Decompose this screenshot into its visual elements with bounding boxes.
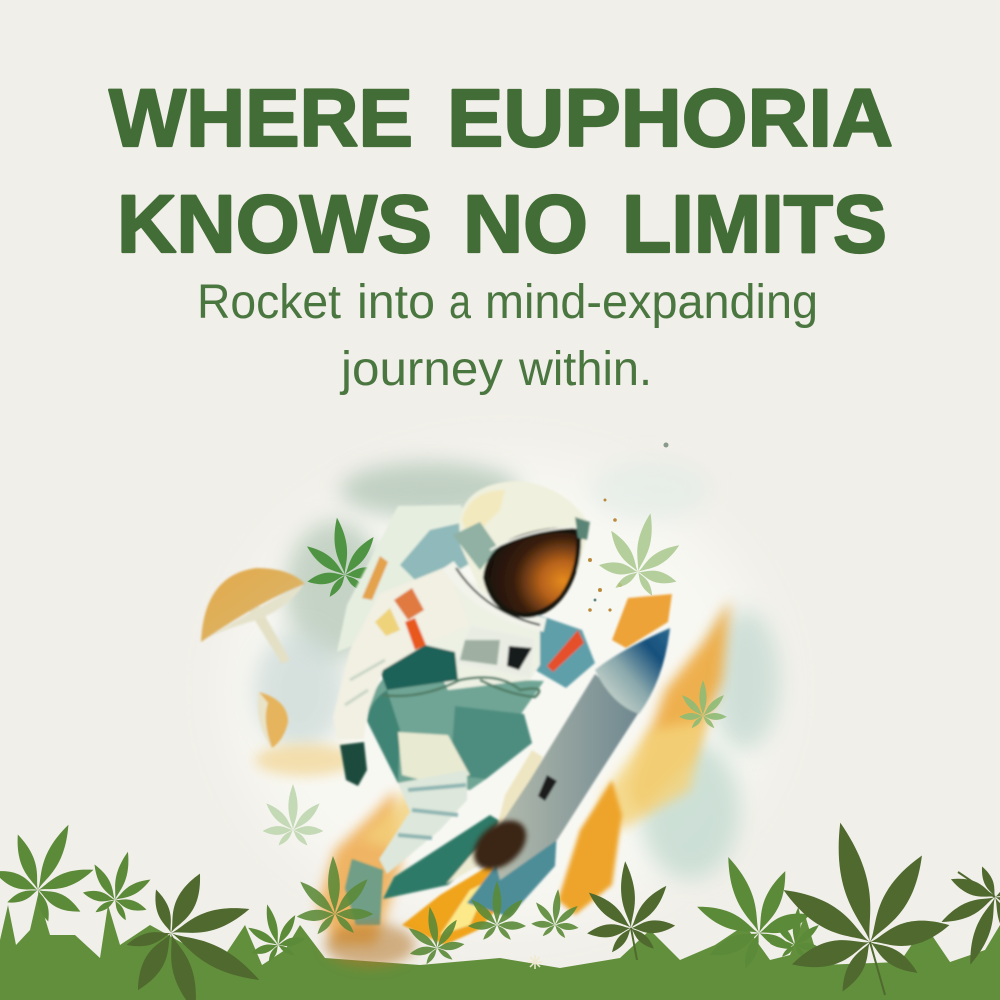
ground foliage bbox=[0, 895, 1000, 1000]
hatch bbox=[538, 775, 557, 801]
lower fin bbox=[383, 815, 500, 899]
subtitle bbox=[197, 276, 818, 396]
nose bbox=[595, 628, 670, 714]
sleeve stripe bbox=[547, 630, 584, 672]
title: NO bbox=[463, 179, 588, 270]
pale cannabis leaves bbox=[263, 505, 727, 847]
chest pack bbox=[456, 626, 534, 677]
torso bbox=[425, 566, 540, 690]
collar stripes bbox=[456, 568, 540, 625]
subtitle: within. bbox=[518, 343, 652, 396]
astronaut bbox=[333, 481, 595, 874]
visor rim bbox=[483, 527, 581, 618]
lower leg bbox=[379, 770, 467, 874]
title: EUPHORIA bbox=[447, 73, 893, 164]
scorch bbox=[464, 810, 536, 880]
light green leaves bbox=[0, 805, 823, 982]
cream sliver bbox=[498, 750, 543, 823]
tubing bbox=[382, 678, 539, 697]
cream band bbox=[398, 732, 470, 785]
subtitle: journey bbox=[339, 343, 503, 396]
arm bbox=[333, 566, 470, 739]
splatter dots bbox=[588, 442, 668, 612]
rocket bbox=[345, 628, 670, 945]
flame tint over ground bbox=[325, 923, 415, 967]
flame core bbox=[440, 880, 490, 935]
visor bbox=[488, 533, 576, 613]
helmet bbox=[459, 481, 590, 620]
arm patch bbox=[405, 618, 426, 650]
body bbox=[490, 674, 639, 880]
right thigh shade bbox=[450, 706, 532, 779]
backpack shadow bbox=[400, 522, 475, 590]
pack controls bbox=[460, 640, 500, 665]
title: LIMITS bbox=[622, 179, 887, 270]
chest screen bbox=[507, 646, 532, 670]
title: WHERE bbox=[109, 73, 413, 164]
title bbox=[109, 73, 893, 270]
hips bbox=[367, 675, 544, 790]
subtitle: into bbox=[357, 276, 435, 329]
small pale star bbox=[528, 955, 542, 969]
torso shade bbox=[379, 645, 458, 690]
helmet knob bbox=[575, 517, 590, 540]
fin cream bbox=[446, 821, 513, 884]
yellow patch bbox=[375, 608, 400, 636]
subtitle: Rocket bbox=[197, 276, 341, 329]
arm fold shading bbox=[345, 660, 385, 705]
glove bbox=[340, 742, 367, 786]
mushrooms bbox=[201, 568, 305, 748]
visor stripe bbox=[490, 527, 581, 550]
backpack bbox=[337, 505, 480, 652]
watercolor washes bbox=[230, 460, 780, 945]
flame bbox=[402, 865, 515, 945]
boot bbox=[345, 859, 383, 925]
backpack marks bbox=[362, 556, 388, 600]
helmet clamp bbox=[453, 522, 498, 570]
dark leaves bbox=[107, 803, 1000, 1000]
helmet highlight bbox=[462, 490, 505, 540]
left hip shade bbox=[367, 690, 400, 783]
subtitle: a bbox=[449, 276, 471, 329]
rear fin bbox=[467, 830, 557, 917]
sleeve bbox=[530, 612, 595, 688]
title: KNOWS bbox=[117, 179, 432, 270]
collar bbox=[448, 565, 545, 625]
knee bands bbox=[398, 785, 466, 838]
small leaf stems bbox=[631, 872, 995, 995]
flag patch bbox=[394, 588, 424, 620]
subtitle: mind-expanding bbox=[485, 276, 818, 329]
